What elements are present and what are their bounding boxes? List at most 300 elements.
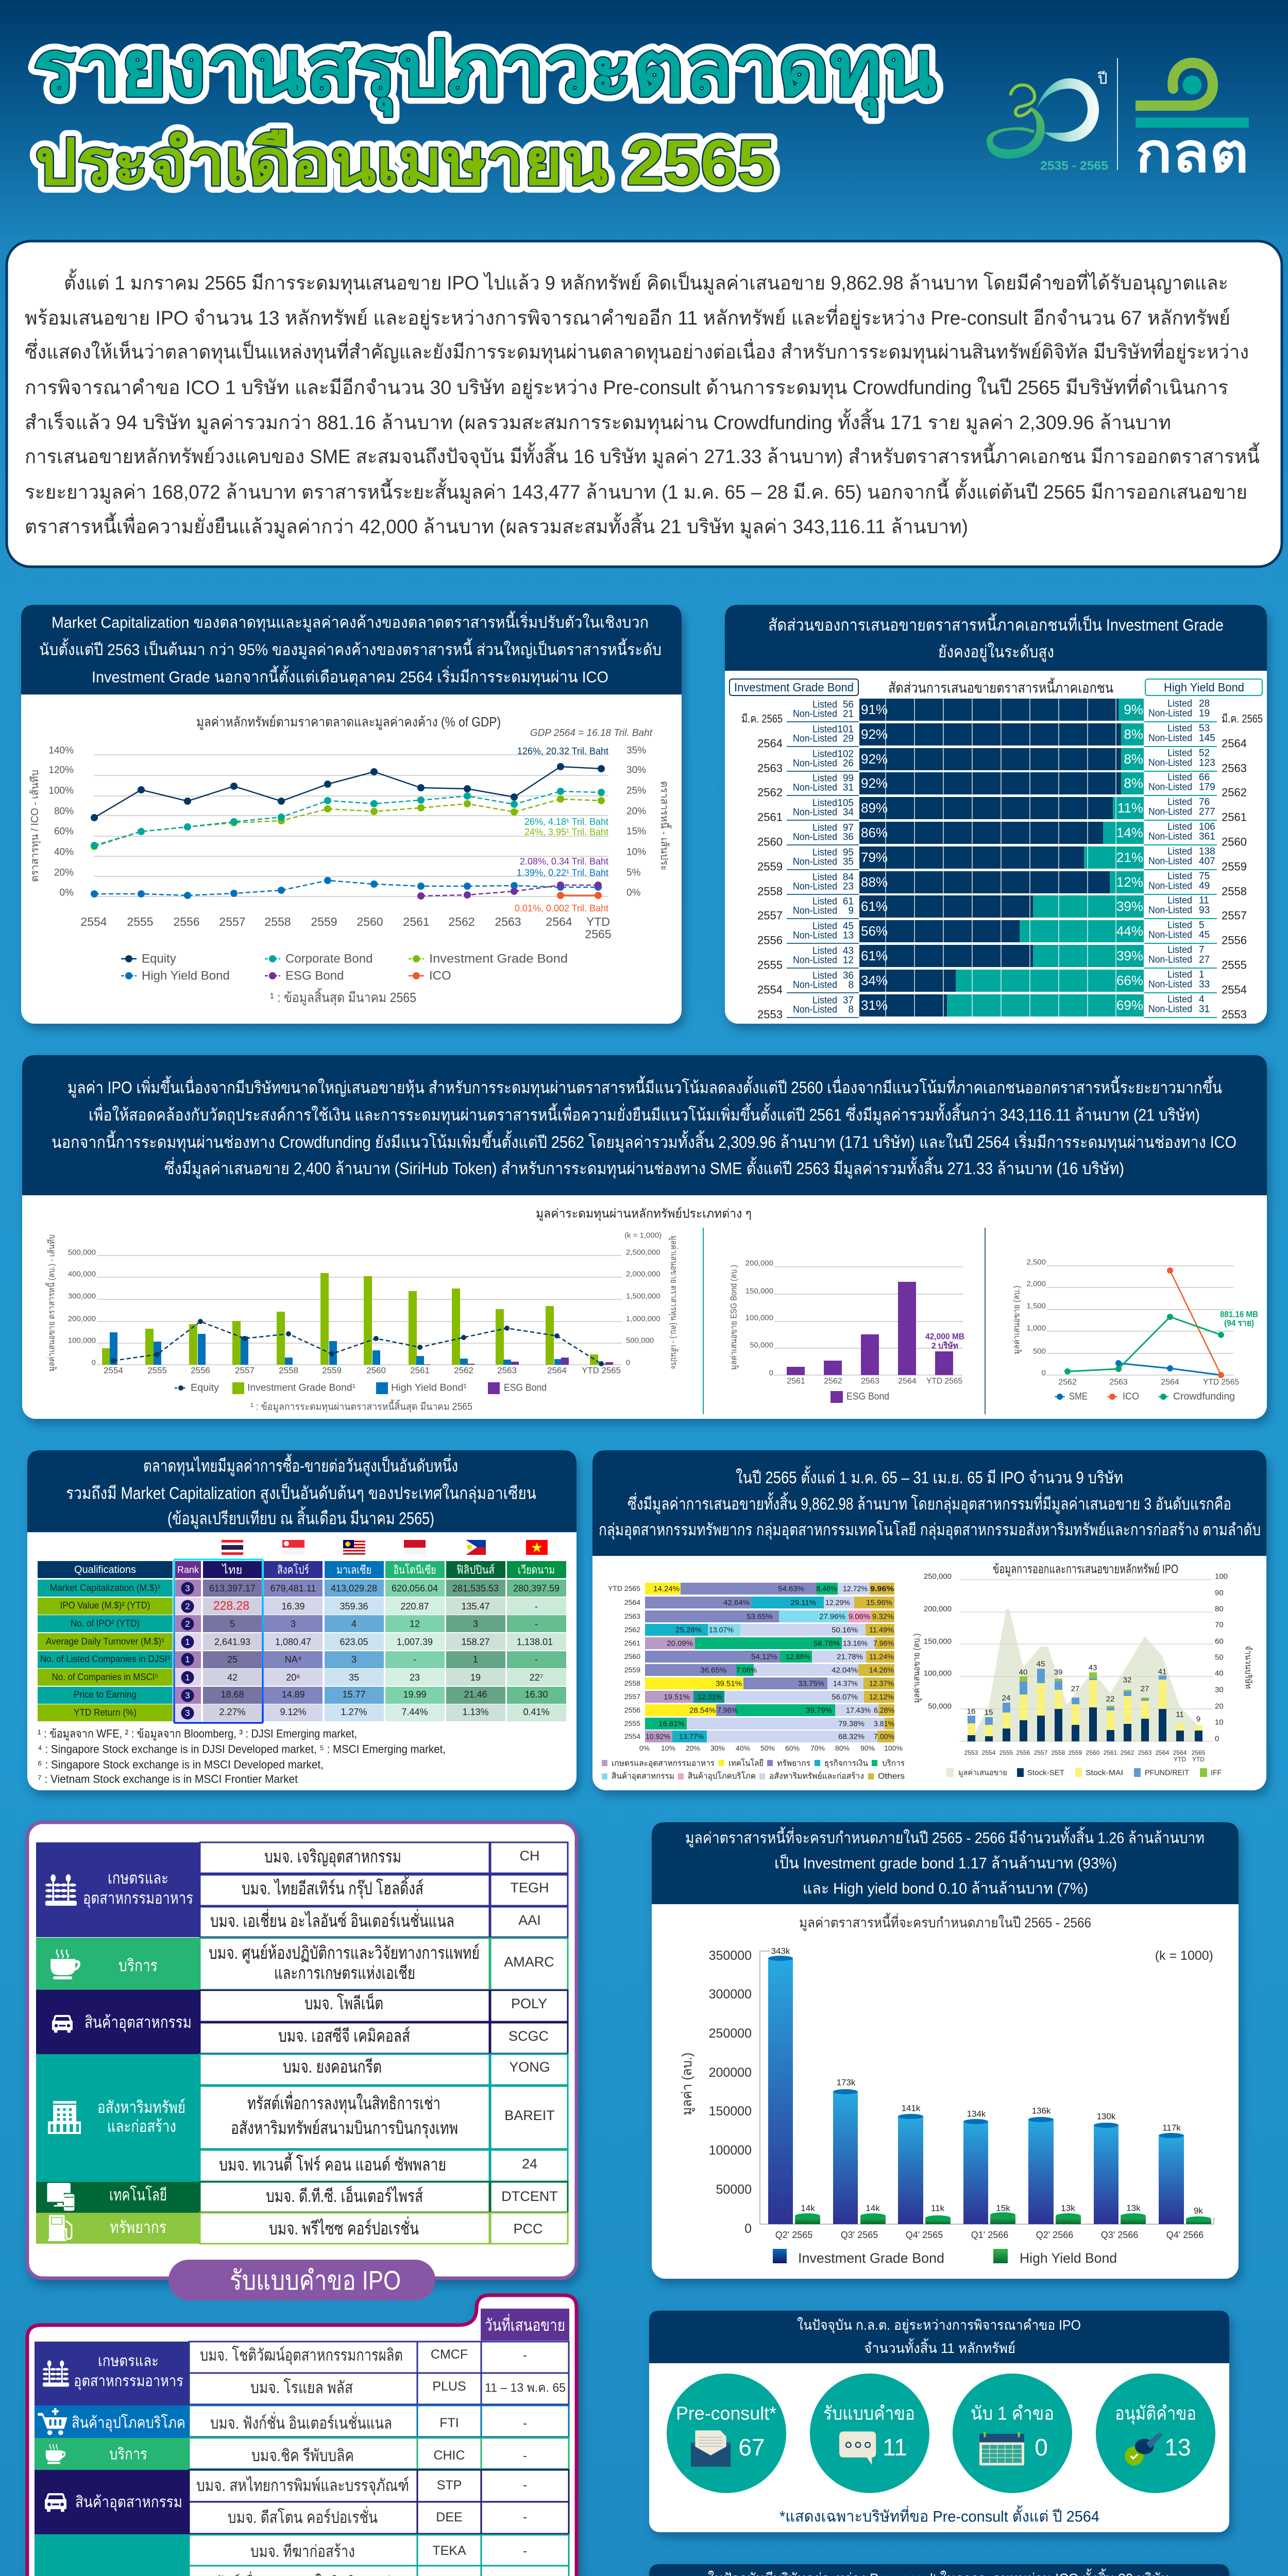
combo chart: IPO value and count: 200,000 bbox=[924, 1604, 952, 1614]
stacked bar chart: IPO share by industry: 40% bbox=[736, 1744, 750, 1752]
combo chart: equity and bonds: 400,000 bbox=[68, 1269, 96, 1279]
comparison table: YTD Return (%) bbox=[74, 1707, 137, 1718]
bar chart: maturity by quarter: Q3' 2566 bbox=[1101, 2230, 1138, 2240]
category labels: อุตสาหกรรมอาหาร bbox=[83, 1889, 193, 1908]
stacked share bars by year: Listed bbox=[812, 798, 837, 809]
stacked share bars by year: 179 bbox=[1199, 782, 1215, 792]
line chart: % of GDP: 2554 bbox=[80, 915, 107, 928]
company names: ทรัสต์เพื่อการลงทุนในสิทธิการเช่า bbox=[247, 2091, 440, 2114]
stacked share bars by year: 27 bbox=[1199, 954, 1210, 965]
stacked share bars by year: Listed bbox=[1167, 699, 1192, 709]
line chart: % of GDP: 2559 bbox=[311, 915, 337, 928]
footnotes: ¹ : ข้อมูลจาก WFE, ² : ข้อมูลจาก Bloomberg, ³ : DJSI Emerging market, bbox=[38, 1727, 357, 1740]
stacked bar chart: IPO share by industry: 39.51% bbox=[716, 1680, 742, 1688]
ticker symbols: DEE bbox=[436, 2510, 463, 2524]
combo chart: equity and bonds: 2555 bbox=[147, 1365, 167, 1376]
line chart: SME, ICO, crowdfunding: YTD 2565 bbox=[1203, 1378, 1239, 1387]
bar chart: ESG bond: 200,000 bbox=[745, 1259, 773, 1267]
offering dates bbox=[485, 2348, 566, 2576]
bar chart: maturity by quarter: 136k bbox=[1032, 2106, 1051, 2115]
stacked share bars by year: Non-Listed bbox=[1148, 807, 1192, 817]
ticker symbols: CH bbox=[519, 1848, 540, 1863]
comparison table: 679,481.11 bbox=[270, 1583, 316, 1594]
bar chart: maturity by quarter: 350000 bbox=[709, 1948, 752, 1963]
stacked share bars by year: 8% bbox=[1124, 775, 1143, 791]
bar chart: maturity by quarter: 15k bbox=[996, 2203, 1010, 2213]
category labels: อสังหาริมทรัพย์ bbox=[97, 2098, 185, 2116]
line chart: % of GDP: 60% bbox=[54, 826, 74, 837]
bar chart: maturity by quarter: 14k bbox=[801, 2203, 815, 2213]
stacked share bars by year: Non-Listed bbox=[793, 955, 837, 965]
ticker symbols: TEKA bbox=[432, 2544, 466, 2558]
stacked share bars by year: 1 bbox=[1199, 970, 1205, 980]
bar chart: maturity by quarter: 117k bbox=[1162, 2123, 1181, 2133]
line chart: % of GDP: 35% bbox=[626, 745, 646, 756]
comparison table: 20⁶ bbox=[286, 1672, 300, 1683]
company names: บมจ. ฟังก์ชั่น อินเตอร์เนชั่นแนล bbox=[210, 2412, 392, 2432]
comparison table: 1.27% bbox=[341, 1707, 367, 1717]
stacked share bars by year: 84 bbox=[843, 872, 854, 883]
combo chart: IPO value and count: 2562 bbox=[1121, 1749, 1134, 1756]
combo chart: IPO value and count: 27 bbox=[1071, 1685, 1079, 1693]
legend: อสังหาริมทรัพย์และก่อสร้าง bbox=[769, 1771, 864, 1781]
stacked share bars by year: Non-Listed bbox=[793, 832, 837, 843]
comparison table: 3 bbox=[185, 1584, 190, 1593]
stacked share bars by year: Non-Listed bbox=[1148, 905, 1192, 916]
stacked share bars by year: Listed bbox=[1167, 748, 1192, 758]
stacked bar chart: IPO share by industry: 0% bbox=[639, 1744, 650, 1752]
stacked share bars by year: 29 bbox=[843, 734, 854, 744]
stacked share bars by year: Listed bbox=[812, 724, 837, 735]
stacked bar chart: IPO share by industry: 100% bbox=[884, 1744, 903, 1752]
line chart: SME, ICO, crowdfunding bbox=[1012, 1258, 1258, 1402]
comparison table: 19.99 bbox=[403, 1689, 427, 1700]
stacked share bars by year: 8% bbox=[1124, 751, 1143, 767]
comparison table: - bbox=[535, 1654, 538, 1665]
stacked bar chart: IPO share by industry: 12.31% bbox=[698, 1693, 722, 1701]
legend bbox=[946, 1768, 1222, 1777]
panel header: Investment Grade นอกจากนี้ตั้งแต่เดือนตุลาคม 2564 เริ่มมีการระดมทุนผ่าน ICO bbox=[92, 666, 608, 687]
ticker symbols: CHIC bbox=[433, 2448, 465, 2463]
legend: ESG Bond bbox=[285, 969, 344, 983]
stacked bar chart: IPO share by industry: 80% bbox=[835, 1744, 850, 1752]
category labels: สินค้าอุตสาหกรรม bbox=[75, 2494, 182, 2512]
stacked share bars by year: 52 bbox=[1199, 748, 1210, 758]
combo chart: IPO value and count: 15 bbox=[985, 1708, 993, 1717]
panel header: จำนวนทั้งสิ้น 11 หลักทรัพย์ bbox=[864, 2338, 1015, 2356]
company names: บมจ. ดี.ที.ซี. เอ็นเตอร์ไพรส์ bbox=[266, 2185, 423, 2206]
panel header: ยังคงอยู่ในระดับสูง bbox=[938, 642, 1054, 662]
bar chart: ESG bond: 150,000 bbox=[745, 1287, 773, 1295]
ticker symbols bbox=[501, 1848, 558, 2236]
comparison table: 1,138.01 bbox=[517, 1637, 553, 1647]
stacked share bars by year: 5 bbox=[1199, 920, 1205, 930]
panel header: ในปี 2565 ตั้งแต่ 1 ม.ค. 65 – 31 เม.ย. 65 มี IPO จำนวน 9 บริษัท bbox=[736, 1466, 1123, 1487]
stacked share bars by year: Listed bbox=[812, 872, 837, 883]
comparison table: 2.27% bbox=[219, 1707, 246, 1717]
legend: High Yield Bond bbox=[1020, 2250, 1117, 2266]
stacked share bars by year: 89% bbox=[861, 800, 888, 816]
panel: ICO applications status bbox=[649, 2564, 1229, 2576]
stacked bar chart: IPO share by industry: 10% bbox=[661, 1744, 675, 1752]
combo chart: IPO value and count: จำนวนบริษัท bbox=[1244, 1646, 1253, 1689]
stacked share bars by year: 2564 bbox=[757, 737, 783, 750]
panel header bbox=[592, 1450, 1266, 1556]
line chart: % of GDP: 0.01%, 0.002 Tril. Baht bbox=[515, 903, 608, 913]
offering dates: 11 – 13 พ.ค. 65 bbox=[485, 2381, 566, 2395]
stacked share bars by year: Listed bbox=[812, 700, 837, 710]
date column header bbox=[481, 2309, 569, 2341]
comparison table: 3 bbox=[473, 1619, 478, 1629]
stacked share bars by year: 31 bbox=[843, 782, 854, 793]
stacked bar chart: IPO share by industry: 10.92% bbox=[646, 1732, 670, 1741]
stacked share bars by year: 2554 bbox=[757, 983, 783, 996]
line chart: % of GDP: 26%, 4.18¹ Tril. Baht bbox=[524, 817, 608, 827]
category labels: เทคโนโลยี bbox=[109, 2185, 167, 2204]
bar chart: ESG bond: 2564 bbox=[898, 1377, 917, 1386]
legend: ICO bbox=[429, 969, 451, 983]
title: ประจำเดือนเมษายน 2565 bbox=[35, 127, 774, 198]
combo chart: IPO value and count: 45 bbox=[1037, 1660, 1045, 1668]
stacked share bars by year: Listed bbox=[1167, 920, 1192, 930]
stacked share bars by year: Listed bbox=[812, 773, 837, 784]
legend box: Investment Grade Bond: Investment Grade Bond bbox=[734, 681, 854, 694]
stacked bar chart: IPO share by industry: 12.12% bbox=[869, 1693, 894, 1701]
footnote: *แสดงเฉพาะบริษัทที่ขอ Pre-consult ตั้งแต่ ปี 2564 bbox=[779, 2505, 1099, 2526]
bar chart: maturity by quarter: 9k bbox=[1194, 2206, 1203, 2215]
stacked share bars by year: Listed bbox=[1167, 821, 1192, 833]
panel header: มูลค่าตราสารหนี้ที่จะครบกำหนดภายในปี 2565 - 2566 มีจำนวนทั้งสิ้น 1.26 ล้านล้านบาท bbox=[685, 1827, 1205, 1848]
offering dates: - bbox=[523, 2510, 527, 2524]
line chart: SME, ICO, crowdfunding: 0 bbox=[1042, 1368, 1046, 1378]
stacked bar chart: IPO share by industry bbox=[602, 1583, 905, 1782]
stacked bar chart: IPO share by industry: 12.72% bbox=[843, 1585, 868, 1593]
stacked bar chart: IPO share by industry: 39.79% bbox=[806, 1706, 832, 1715]
comparison table: 23 bbox=[410, 1672, 420, 1683]
comparison table: 2 bbox=[185, 1601, 190, 1612]
panel: IPO applications status bbox=[649, 2311, 1229, 2532]
stacked bar chart: IPO share by industry: 7.96% bbox=[873, 1639, 894, 1648]
stat: counted: นับ 1 คำขอ bbox=[971, 2403, 1054, 2424]
stacked share bars by year: 13 bbox=[843, 930, 854, 941]
stacked share bars by year: Non-Listed bbox=[1148, 782, 1192, 792]
stacked bar chart: IPO share by industry: 14.37% bbox=[833, 1680, 858, 1688]
stacked bar chart: IPO share by industry: 17.43% bbox=[846, 1706, 871, 1715]
panel: market summary intro: พร้อมเสนอขาย IPO จำนวน 13 หลักทรัพย์ และอยู่ระหว่างการพิจารณาคำขออีก 11 หลักทรัพย์ และที่อยู่ระหว่าง Pre-consult อีกจำนวน 67 หลักทรัพย์ bbox=[25, 304, 1230, 330]
combo chart: equity and bonds: (k = 1,000) bbox=[624, 1231, 662, 1240]
stacked share bars by year: 92% bbox=[861, 726, 888, 742]
line chart: % of GDP: 20% bbox=[626, 806, 646, 817]
stacked bar chart: IPO share by industry: 19.51% bbox=[664, 1693, 690, 1701]
line chart: SME, ICO, crowdfunding: ICO bbox=[1123, 1391, 1139, 1402]
stacked share bars by year: 102 bbox=[837, 749, 854, 759]
stat: filed: 11 bbox=[883, 2434, 907, 2461]
stacked bar chart: IPO share by industry: 2556 bbox=[624, 1706, 640, 1714]
combo chart: IPO value and count: 2555 bbox=[999, 1749, 1013, 1756]
stacked share bars by year: 28 bbox=[1199, 699, 1210, 709]
label pill: filed IPO bbox=[168, 2260, 435, 2300]
bar chart: maturity by quarter: มูลค่า (ลบ.) bbox=[679, 2053, 695, 2115]
line chart: % of GDP: 2563 bbox=[495, 915, 521, 928]
panel header: ซึ่งมีมูลค่าเสนอขาย 2,400 ล้านบาท (SiriHub Token) สำหรับการระดมทุนผ่านช่องทาง SME ตั้งแต่ปี 2563 มีมูลค่ารวมทั้งสิ้น 271.33 ล้านบาท (16 บริษัท) bbox=[164, 1157, 1124, 1179]
stacked share bars by year: 14% bbox=[1116, 825, 1143, 840]
stacked share bars by year: Non-Listed bbox=[793, 807, 837, 818]
stacked share bars by year: 56 bbox=[843, 700, 854, 710]
combo chart: equity and bonds: 0 bbox=[92, 1358, 96, 1367]
panel: bonds maturing bbox=[652, 1822, 1239, 2279]
stacked share bars by year: Non-Listed bbox=[1148, 1004, 1192, 1015]
stacked share bars by year: 2561 bbox=[1222, 811, 1247, 823]
stacked bar chart: IPO share by industry: 7.00% bbox=[874, 1732, 894, 1741]
stacked share bars by year: 86% bbox=[861, 825, 888, 840]
legend: High Yield Bond¹ bbox=[391, 1383, 467, 1393]
comparison table: Market Capitalization (M.$)¹ bbox=[49, 1583, 161, 1593]
company names bbox=[194, 2346, 412, 2576]
stacked share bars by year: 2560 bbox=[757, 836, 783, 848]
icons bbox=[45, 1874, 81, 2241]
legend: เกษตรและอุตสาหกรรมอาหาร bbox=[612, 1759, 715, 1768]
stacked bar chart: IPO share by industry: 28.54% bbox=[689, 1706, 716, 1715]
stacked bar chart: IPO share by industry: 42.04% bbox=[832, 1666, 858, 1674]
line chart: SME, ICO, crowdfunding: 2,000 bbox=[1026, 1280, 1046, 1288]
stacked share bars by year: Listed bbox=[812, 946, 837, 956]
line chart: SME, ICO, crowdfunding: มูลค่าเสนอขาย (ลบ.) bbox=[1012, 1286, 1022, 1354]
bar chart: ESG bond: มูลค่าเสนอขาย ESG Bond (ลบ.) bbox=[728, 1265, 739, 1370]
combo chart: IPO value and count: 80 bbox=[1215, 1604, 1224, 1614]
stacked share bars by year: Listed bbox=[1167, 970, 1192, 980]
combo chart: IPO value and count: 41 bbox=[1158, 1667, 1166, 1676]
footnotes bbox=[38, 1727, 446, 1786]
combo chart: IPO value and count: 2560 bbox=[1086, 1749, 1100, 1756]
panel: ASEAN comparison bbox=[27, 1450, 577, 1790]
stacked share bars by year: 138 bbox=[1199, 846, 1215, 857]
stacked share bars by year: 12 bbox=[843, 955, 854, 965]
line chart: % of GDP: GDP 2564 = 16.18 Tril. Baht bbox=[530, 727, 653, 739]
stacked share bars by year: 66% bbox=[1116, 973, 1143, 988]
date column header: วันที่เสนอขาย bbox=[485, 2314, 565, 2334]
stacked bar chart: IPO share by industry: 21.78% bbox=[837, 1653, 863, 1661]
line chart: % of GDP: 126%, 20.32 Tril. Baht bbox=[517, 746, 608, 756]
stacked bar chart: IPO share by industry: 70% bbox=[810, 1744, 825, 1752]
combo chart: IPO value and count: 9 bbox=[1196, 1715, 1200, 1724]
stacked share bars by year: Non-Listed bbox=[793, 881, 837, 892]
comparison table: 12 bbox=[410, 1619, 420, 1629]
stacked share bars by year: Listed bbox=[1167, 772, 1192, 783]
line chart: % of GDP: 5% bbox=[626, 868, 641, 878]
stacked share bars by year: Non-Listed bbox=[1148, 881, 1192, 891]
comparison table: 19 bbox=[470, 1672, 481, 1683]
stacked share bars by year: 21 bbox=[843, 709, 854, 719]
combo chart: equity and bonds: 2561 bbox=[410, 1365, 430, 1376]
bar chart: maturity by quarter: มูลค่าตราสารหนี้ที่จะครบกำหนดภายในปี 2565 - 2566 bbox=[799, 1912, 1091, 1931]
line chart: SME, ICO, crowdfunding: 2562 bbox=[1058, 1378, 1077, 1387]
combo chart: IPO value and count: 2564 bbox=[1156, 1749, 1170, 1756]
comparison table: 4 bbox=[351, 1619, 357, 1629]
comparison table: 2,641.93 bbox=[214, 1637, 250, 1647]
bar chart: maturity by quarter: 14k bbox=[866, 2203, 880, 2213]
combo chart: IPO value and count: 39 bbox=[1054, 1668, 1062, 1676]
stat: counted: 0 bbox=[1035, 2434, 1048, 2461]
footnotes: ⁶ : Singapore Stock exchange is in MSCI Developed market, bbox=[38, 1758, 324, 1771]
combo chart: equity and bonds bbox=[45, 1231, 679, 1413]
legend: Stock-MAI bbox=[1086, 1768, 1123, 1777]
stacked share bars by year: 76 bbox=[1199, 796, 1210, 808]
stacked bar chart: IPO share by industry: 9.32% bbox=[872, 1613, 894, 1621]
ticker symbols: FTI bbox=[439, 2416, 459, 2430]
stacked share bars by year: 26 bbox=[843, 758, 854, 769]
legend: Investment Grade Bond bbox=[798, 2250, 944, 2266]
stacked share bars by year: 61 bbox=[843, 896, 854, 907]
stacked bar chart: IPO share by industry: 2557 bbox=[624, 1692, 640, 1701]
panel header bbox=[652, 1822, 1239, 1904]
legend: IFF bbox=[1211, 1768, 1222, 1777]
stacked share bars by year: 2560 bbox=[1222, 836, 1247, 848]
panel: filed IPO applications table bbox=[27, 1822, 577, 2278]
stacked share bars by year: Non-Listed bbox=[1148, 757, 1192, 769]
line chart: SME, ICO, crowdfunding: 2,500 bbox=[1026, 1258, 1046, 1266]
stacked share bars by year: 123 bbox=[1199, 757, 1215, 769]
bar chart: maturity by quarter: 0 bbox=[744, 2222, 752, 2236]
stacked bar chart: IPO share by industry: 12.86% bbox=[786, 1653, 810, 1661]
ticker symbols: PLUS bbox=[432, 2379, 466, 2394]
category labels: เกษตรและ bbox=[98, 2352, 159, 2370]
stacked bar chart: IPO share by industry: 11.24% bbox=[869, 1653, 894, 1661]
line chart: % of GDP: 2.08%, 0.34 Tril. Baht bbox=[520, 856, 608, 867]
line chart: % of GDP: 2557 bbox=[219, 915, 246, 928]
combo chart: IPO value and count: 0 bbox=[1215, 1734, 1219, 1743]
stacked share bars by year: 99 bbox=[843, 773, 854, 784]
company names: บมจ. ยงคอนกรีต bbox=[283, 2057, 382, 2077]
stacked bar chart: IPO share by industry: 12.29% bbox=[825, 1598, 850, 1607]
stacked share bars by year: Listed bbox=[812, 971, 837, 981]
stacked share bars by year: 34 bbox=[843, 807, 854, 818]
panel: market summary intro: ซึ่งแสดงให้เห็นว่าตลาดทุนเป็นแหล่งทุนที่สำคัญและยังมีการระดมทุนผ่านตลาดทุนอย่างต่อเนื่อง สำหรับการระดมทุนผ่านสินทรัพย์ดิจิทัล มีบริษัทที่อยู่ระหว่าง bbox=[25, 338, 1249, 364]
stacked share bars by year: Non-Listed bbox=[793, 980, 837, 990]
legend: PFUND/REIT bbox=[1145, 1768, 1189, 1777]
stacked bar chart: IPO share by industry: 13.07% bbox=[709, 1626, 734, 1634]
line chart: SME, ICO, crowdfunding: 2564 bbox=[1161, 1378, 1179, 1387]
legend: Corporate Bond bbox=[285, 952, 372, 965]
table header row: อินโดนีเซีย bbox=[394, 1563, 436, 1577]
stat: approved: อนุมัติคำขอ bbox=[1115, 2403, 1196, 2425]
stacked share bars by year: 2553 bbox=[757, 1008, 783, 1021]
bar chart: maturity by quarter: 300000 bbox=[709, 1987, 752, 2002]
legend bbox=[773, 2249, 1117, 2266]
bar chart: ESG bond: 50,000 bbox=[750, 1341, 773, 1350]
panel: market summary intro bbox=[7, 241, 1282, 567]
legend bbox=[175, 1382, 547, 1394]
stacked share bars by year: 31% bbox=[861, 997, 888, 1013]
panel header: ในปัจจุบัน ก.ล.ต. อยู่ระหว่างการพิจารณาคำขอ IPO bbox=[797, 2317, 1081, 2334]
stacked share bars by year: 2557 bbox=[1222, 909, 1247, 922]
table grid bbox=[200, 1842, 568, 2244]
stacked share bars by year: Non-Listed bbox=[793, 734, 837, 744]
line chart: % of GDP: 80% bbox=[54, 806, 74, 817]
bar chart: ESG bond: 42,000 MB bbox=[925, 1331, 964, 1342]
stacked bar chart: IPO share by industry: 58.78% bbox=[814, 1639, 840, 1648]
panel header: นับตั้งแต่ปี 2563 เป็นต้นมา กว่า 95% ของมูลค่าคงค้างของตราสารหนี้ ส่วนใหญ่เป็นตราสารหนี้ระดับ bbox=[39, 638, 662, 659]
table header row: Rank bbox=[177, 1565, 199, 1575]
stacked share bars by year: Listed bbox=[812, 995, 837, 1006]
ticker symbols: TEGH bbox=[510, 1880, 549, 1895]
combo chart: IPO value and count: 90 bbox=[1215, 1589, 1224, 1597]
stacked share bars by year: Listed bbox=[1167, 723, 1192, 734]
combo chart: equity and bonds: 2560 bbox=[366, 1365, 386, 1376]
bar chart: maturity by quarter: Q2' 2566 bbox=[1036, 2230, 1073, 2240]
stacked bar chart: IPO share by industry: 9.96% bbox=[870, 1585, 894, 1593]
combo chart: equity and bonds: มูลค่าเสนอขาย ตราสารหนี้ (ลบ.) - เส้นทึบ bbox=[45, 1234, 57, 1371]
stacked share bars by year: 75 bbox=[1199, 871, 1210, 882]
stacked bar chart: IPO share by industry: 7.06% bbox=[736, 1666, 757, 1674]
stacked share bars by year: Non-Listed bbox=[1148, 733, 1192, 744]
line chart: SME, ICO, crowdfunding: Crowdfunding bbox=[1173, 1391, 1235, 1402]
stacked bar chart: IPO share by industry: 15.96% bbox=[866, 1598, 892, 1607]
stacked share bars by year: 2556 bbox=[1222, 934, 1247, 947]
stacked share bars by year: 2561 bbox=[757, 811, 783, 823]
stacked bar chart: IPO share by industry: YTD 2565 bbox=[608, 1584, 640, 1592]
category labels: อุตสาหกรรมอาหาร bbox=[74, 2373, 183, 2391]
legend bbox=[121, 952, 568, 983]
combo chart: IPO value and count: 40 bbox=[1215, 1669, 1224, 1677]
stacked share bars by year: Listed bbox=[1167, 846, 1192, 857]
comparison table: - bbox=[413, 1654, 416, 1665]
panel header: ตลาดทุนไทยมีมูลค่าการซื้อ-ขายต่อวันสูงเป็นอันดับหนึ่ง bbox=[143, 1454, 458, 1477]
stacked share bars by year: 37 bbox=[843, 995, 854, 1006]
stacked share bars by year: 2563 bbox=[1222, 761, 1247, 775]
stat: pre-consult: Pre-consult* bbox=[676, 2403, 776, 2424]
flags bbox=[222, 1540, 548, 1555]
stacked bar chart: IPO share by industry: 25.28% bbox=[675, 1626, 702, 1634]
combo chart: IPO value and count: 2558 bbox=[1052, 1749, 1065, 1756]
panel header bbox=[22, 1055, 1267, 1195]
stacked share bars by year: 9% bbox=[1124, 702, 1143, 717]
combo chart: equity and bonds: 2559 bbox=[322, 1365, 342, 1376]
stacked share bars by year: 2557 bbox=[757, 909, 783, 922]
panel: market summary intro: สำเร็จแล้ว 94 บริษัท มูลค่ารวมกว่า 881.16 ล้านบาท (ผลรวมสะสมการระดมทุนผ่าน Crowdfunding ทั้งสิ้น 171 ราย มูลค่า 2,309.96 ล้านบาท bbox=[25, 408, 1171, 434]
company names: และการเกษตรแห่งเอเชีย bbox=[274, 1963, 415, 1983]
legend: Equity bbox=[142, 952, 176, 965]
SEC mark bbox=[1136, 63, 1249, 183]
combo chart: equity and bonds: 2,000,000 bbox=[626, 1269, 660, 1279]
line chart: % of GDP: ตราสารทุน / ICO - เส้นทึบ bbox=[29, 770, 41, 882]
stacked share bars by year: 56% bbox=[861, 923, 888, 939]
legend: บริการ bbox=[882, 1759, 905, 1768]
stacked share bars by year: 39% bbox=[1116, 899, 1143, 914]
ticker symbols: DTCENT bbox=[501, 2189, 558, 2204]
bar chart: maturity by quarter: 11k bbox=[931, 2203, 945, 2213]
offering dates: - bbox=[523, 2348, 527, 2363]
combo chart: IPO value and count bbox=[912, 1562, 1253, 1777]
ticker symbols: 24 bbox=[522, 2156, 537, 2172]
line chart: % of GDP: 30% bbox=[626, 765, 646, 776]
company names: บมจ. โชติวัฒน์อุตสาหกรรมการผลิต bbox=[200, 2346, 403, 2365]
comparison table: 3 bbox=[351, 1654, 357, 1665]
title: รายงานสรุปภาวะตลาดทุน bbox=[33, 25, 937, 117]
table header row: Qualifications bbox=[74, 1564, 136, 1575]
panel header bbox=[21, 605, 682, 694]
stacked share bars by year: 2559 bbox=[1222, 860, 1247, 873]
stacked share bars by year: 44% bbox=[1116, 923, 1143, 939]
stacked share bars by year: Non-Listed bbox=[1148, 954, 1192, 965]
stacked share bars by year: 2558 bbox=[1222, 885, 1247, 897]
category labels: บริการ bbox=[118, 1956, 158, 1975]
stacked share bars by year: 91% bbox=[861, 702, 888, 717]
legend: ทรัพยากร bbox=[777, 1759, 810, 1768]
stacked share bars by year: 92% bbox=[861, 751, 888, 767]
combo chart: IPO value and count: 22 bbox=[1106, 1695, 1114, 1703]
offering dates: - bbox=[523, 2544, 527, 2558]
legend: Investment Grade Bond¹ bbox=[247, 1383, 355, 1393]
